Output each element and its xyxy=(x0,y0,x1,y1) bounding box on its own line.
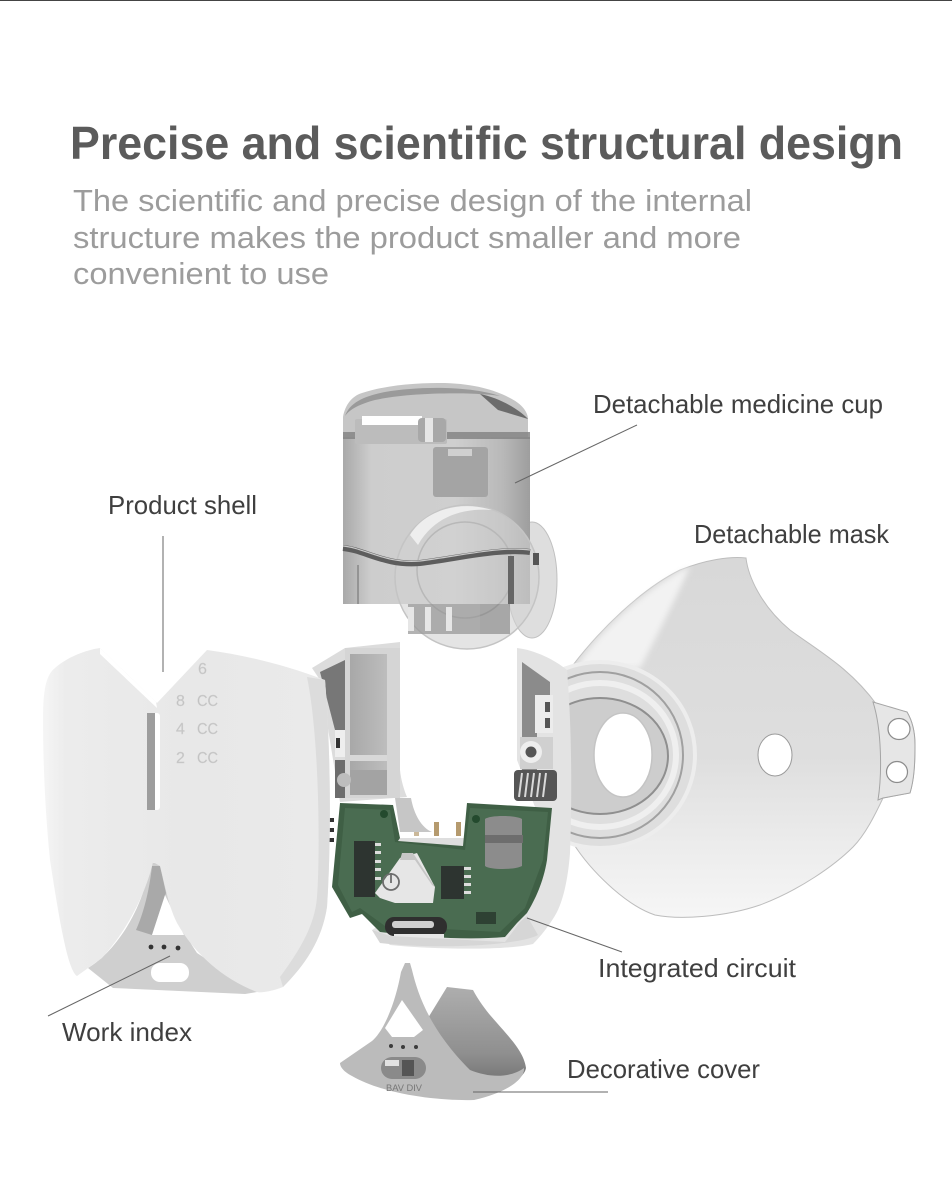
bottom grey rim xyxy=(362,914,538,946)
connector pins xyxy=(393,800,468,840)
inner tab xyxy=(433,447,488,497)
subtitle text block: The scientific and precise design of the internal xyxy=(73,183,752,218)
dome lid xyxy=(343,383,528,437)
label: Detachable mask: Detachable mask xyxy=(694,519,890,549)
label: Detachable medicine cup: Detachable medicine cup xyxy=(593,389,883,419)
nozzle sphere xyxy=(395,505,539,649)
shell side band xyxy=(280,677,330,987)
engraved numbers: CC xyxy=(197,693,218,710)
green circuit board xyxy=(332,803,552,938)
slot xyxy=(147,713,160,810)
metal band xyxy=(343,548,530,563)
usb port xyxy=(385,917,447,936)
nozzle teeth xyxy=(408,604,480,634)
circuit housing illustration xyxy=(312,642,571,949)
left wall xyxy=(312,642,407,802)
subtitle text block: structure makes the product smaller and more xyxy=(73,220,741,255)
title: Precise and scientific structural design xyxy=(70,117,903,169)
engraved numbers xyxy=(176,661,218,767)
battery connector vents xyxy=(324,818,334,842)
engraved numbers: 6 xyxy=(198,661,207,678)
engraved numbers: CC xyxy=(197,721,218,738)
subtitle text block xyxy=(73,183,752,291)
medicine cup illustration xyxy=(343,383,557,649)
inductor xyxy=(485,816,522,869)
engraved numbers: CC xyxy=(197,750,218,767)
leader lines xyxy=(48,425,637,1092)
subtitle text block: convenient to use xyxy=(73,256,329,291)
notch bevel xyxy=(100,648,157,708)
engraved numbers: 8 xyxy=(176,693,185,710)
engraved numbers: 4 xyxy=(176,721,185,738)
product shell illustration xyxy=(43,648,330,994)
shell main face: both lobes joined xyxy=(43,648,330,992)
label: Decorative cover: Decorative cover xyxy=(567,1054,760,1084)
label: Integrated circuit: Integrated circuit xyxy=(598,953,797,983)
engraved numbers: 2 xyxy=(176,750,185,767)
base holes xyxy=(152,895,184,935)
label: Work index: Work index xyxy=(62,1017,192,1047)
power button xyxy=(375,853,435,903)
label: Product shell: Product shell xyxy=(108,490,257,520)
decorative cover illustration: BAV DIV xyxy=(386,1083,422,1093)
right wall xyxy=(372,648,571,949)
labels xyxy=(62,389,890,1084)
outer disc behind cup xyxy=(507,522,557,638)
inner base xyxy=(88,862,257,994)
cup body xyxy=(343,437,530,604)
spring xyxy=(514,770,557,801)
mask illustration xyxy=(564,557,916,918)
chips xyxy=(354,841,375,897)
decorative cover illustration xyxy=(340,963,526,1100)
mask ring xyxy=(564,662,697,847)
